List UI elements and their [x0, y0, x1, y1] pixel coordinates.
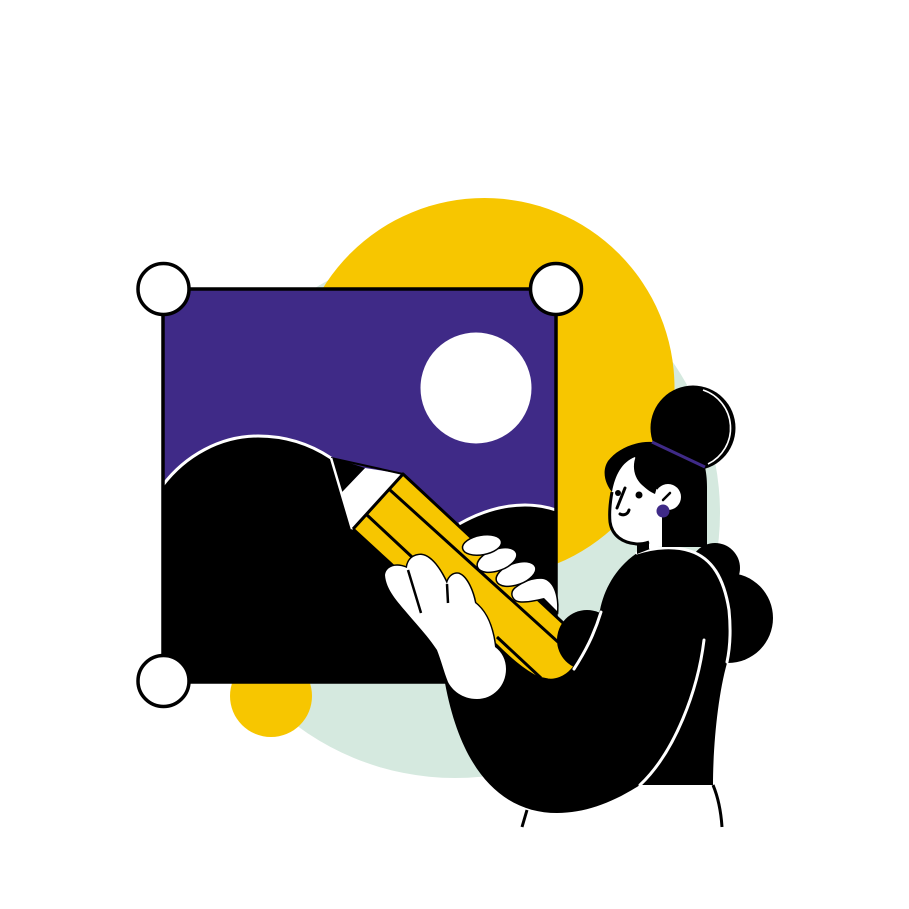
handle: top right — [530, 264, 582, 314]
hill outlines — [163, 436, 556, 524]
finger 3 — [494, 558, 538, 590]
hair bun — [650, 386, 736, 470]
finger 1 — [462, 533, 502, 557]
face outline — [610, 492, 649, 544]
shoulder and arm line — [637, 548, 730, 662]
side line — [640, 640, 704, 785]
left hill — [163, 436, 450, 682]
frame border — [163, 289, 556, 682]
finger 4 — [513, 579, 557, 611]
finger separators — [408, 570, 448, 613]
head — [605, 386, 736, 554]
pencil lead — [331, 457, 365, 492]
front hand — [385, 555, 506, 699]
back hand fingers — [462, 533, 557, 611]
finger 2 — [475, 544, 519, 576]
pencil tip highlight — [331, 458, 352, 529]
right hill — [430, 505, 556, 682]
fringe — [634, 448, 662, 494]
torso — [445, 548, 731, 813]
pencil — [331, 457, 590, 680]
face and neck fill — [610, 457, 662, 549]
nose and mouth — [617, 488, 629, 515]
woman's body — [445, 543, 773, 827]
pencil wood tip — [342, 468, 403, 530]
mint background circle — [190, 248, 720, 778]
pencil tip outline — [331, 458, 403, 474]
pencil body — [353, 474, 590, 680]
earring — [656, 504, 670, 518]
hair — [605, 442, 707, 547]
back sleeve puffs — [683, 543, 773, 663]
handle: top left — [138, 264, 189, 314]
body highlight lines — [574, 548, 730, 785]
palm and fingers — [385, 555, 506, 699]
bun highlight — [703, 390, 731, 464]
cuff line — [574, 612, 601, 669]
pencil grooves — [353, 474, 558, 678]
hair tie — [652, 442, 705, 467]
large yellow circle — [294, 198, 674, 578]
legs — [522, 785, 722, 827]
eyes — [615, 490, 642, 498]
frame sky — [163, 289, 556, 682]
front sleeve cuff — [557, 610, 617, 670]
image frame with landscape — [163, 289, 556, 682]
neck shadow — [637, 541, 650, 554]
ear — [655, 484, 681, 510]
ear detail — [663, 493, 670, 500]
moon — [420, 332, 532, 444]
handle: bottom left — [138, 656, 189, 706]
small yellow circle — [230, 655, 312, 737]
